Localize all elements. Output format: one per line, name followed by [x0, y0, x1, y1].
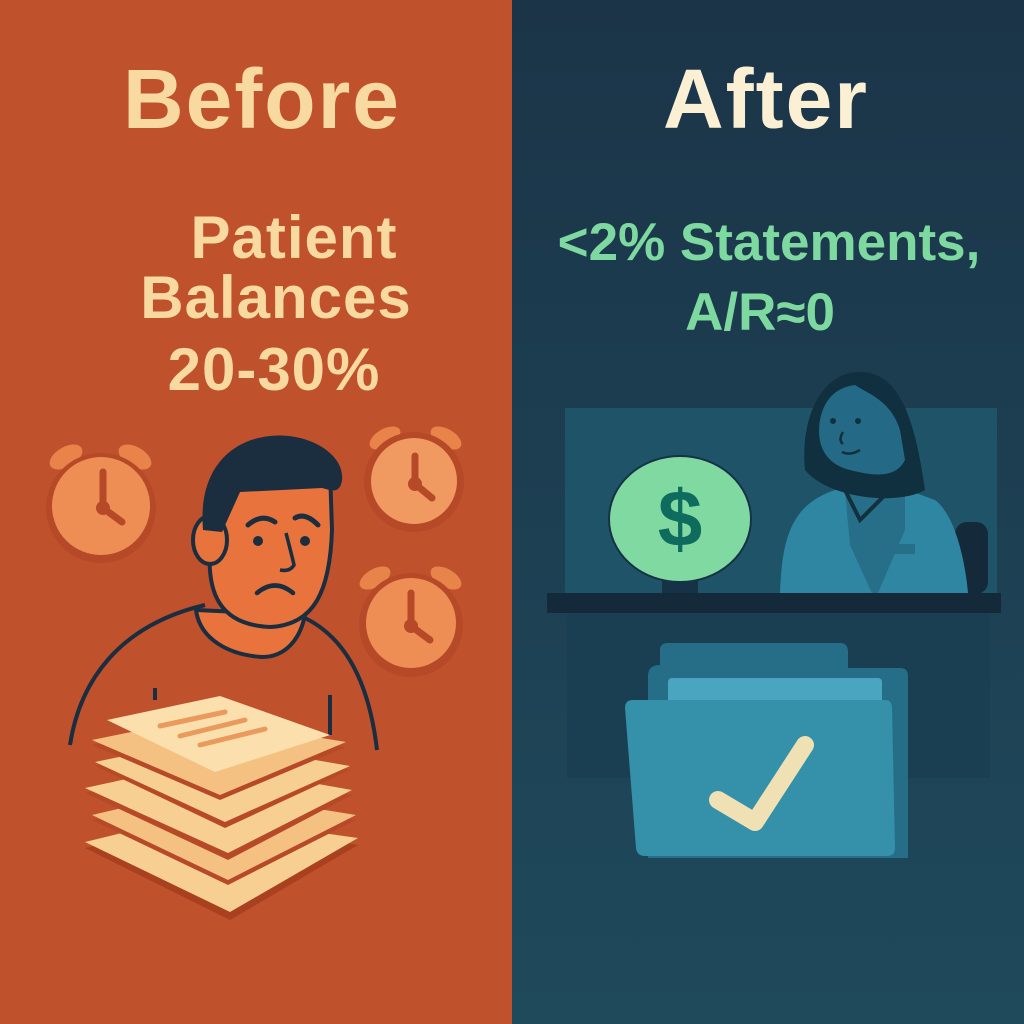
panel: before — [0, 0, 512, 1024]
illustration: receptionist — [780, 372, 988, 600]
text block: patient balances — [140, 204, 412, 403]
text block: statements: A/R≈0 — [685, 283, 835, 342]
illustration: front desk — [547, 372, 1001, 858]
heading: After: After — [663, 52, 869, 146]
heading: Before: Before — [123, 52, 401, 146]
text block: patient balances: 20‑30% — [168, 336, 380, 403]
icon: folder with check — [625, 643, 908, 858]
illustration: paper stack — [85, 696, 358, 920]
text block: patient balances: Balances — [140, 264, 412, 331]
icon: clock top right — [364, 422, 465, 532]
icon: dollar monitor: $ — [658, 474, 702, 563]
illustration: stressed man — [70, 436, 377, 750]
icon: clock left — [45, 439, 156, 563]
panel: after — [512, 0, 1024, 1024]
text block: statements — [558, 213, 980, 342]
icon: dollar monitor — [609, 456, 751, 593]
text block: patient balances: Patient — [190, 204, 398, 271]
icon: clock bottom right — [356, 562, 465, 677]
text block: statements: <2% Statements, — [558, 213, 980, 272]
